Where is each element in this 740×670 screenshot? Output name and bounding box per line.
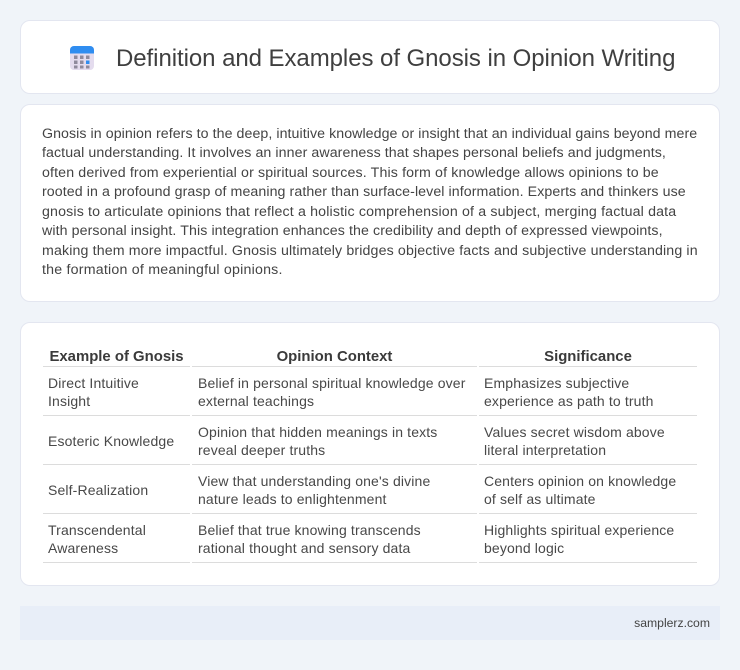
panel: examples table: View that understanding one's divine [198,473,430,489]
panel: examples table: Significance [544,349,632,365]
panel: examples table: Opinion Context [277,349,392,365]
panel: examples table: nature leads to enlightenment [198,491,387,507]
panel: definition text: making them more impactful. Gnosis ultimately bridges objective facts and subjective understanding in [42,243,698,259]
panel: examples table: external teachings [198,393,314,409]
row: transcendental awareness: Transcendental [48,522,146,538]
footer bar [20,606,720,640]
panel: definition text: the formation of meaningful opinions. [42,262,283,278]
panel: definition text: rooted in a profound grasp of meaning rather than surface-level information. Experts and thinkers use [42,184,686,200]
panel: examples table: reveal deeper truths [198,442,325,458]
footer text: samplerz.com [634,616,710,630]
panel: examples table: literal interpretation [484,442,606,458]
row: self-realization: Self-Realization [48,482,148,498]
panel: examples table: Opinion that hidden meanings in texts [198,424,437,440]
title: Definition and Examples of Gnosis in Opinion Writing [116,45,675,72]
header panel [20,20,720,94]
panel: examples table: of self as ultimate [484,491,596,507]
panel: definition text [20,104,720,302]
panel: examples table: rational thought and sensory data [198,540,410,556]
row: direct intuitive insight: Insight [48,393,90,409]
row: transcendental awareness [48,522,146,556]
panel: examples table: Centers opinion on knowledge [484,473,676,489]
panel: definition text: gnosis to articulate opinions that reflect a holistic comprehension of a subject, merging factual data [42,204,676,220]
panel: definition text: often derived from experiential or spiritual sources. This form of knowledge allows opinions to be [42,165,659,181]
panel: examples table: experience as path to truth [484,393,654,409]
panel: examples table: Belief that true knowing transcends [198,522,421,538]
panel: examples table: beyond logic [484,540,564,556]
row: esoteric knowledge: Esoteric Knowledge [48,433,174,449]
row: transcendental awareness: Awareness [48,540,118,556]
icon: calendar [70,46,94,70]
panel: examples table [20,322,720,586]
panel: definition text: with personal insight. This integration enhances the credibility and depth of expressed viewpoints, [42,223,663,239]
panel: examples table: Values secret wisdom above [484,424,665,440]
panel: examples table: Belief in personal spiritual knowledge over [198,375,466,391]
panel: definition text: factual understanding. It involves an inner awareness that shapes personal beliefs and judgments, [42,145,666,161]
panel: definition text: Gnosis in opinion refers to the deep, intuitive knowledge or insight that an individual gains beyond mere [42,126,697,142]
panel: examples table: Emphasizes subjective [484,375,629,391]
row: direct intuitive insight: Direct Intuitive [48,375,139,391]
row: direct intuitive insight [48,375,139,409]
panel: examples table: Highlights spiritual experience [484,522,674,538]
table header: Example of Gnosis [49,349,184,365]
